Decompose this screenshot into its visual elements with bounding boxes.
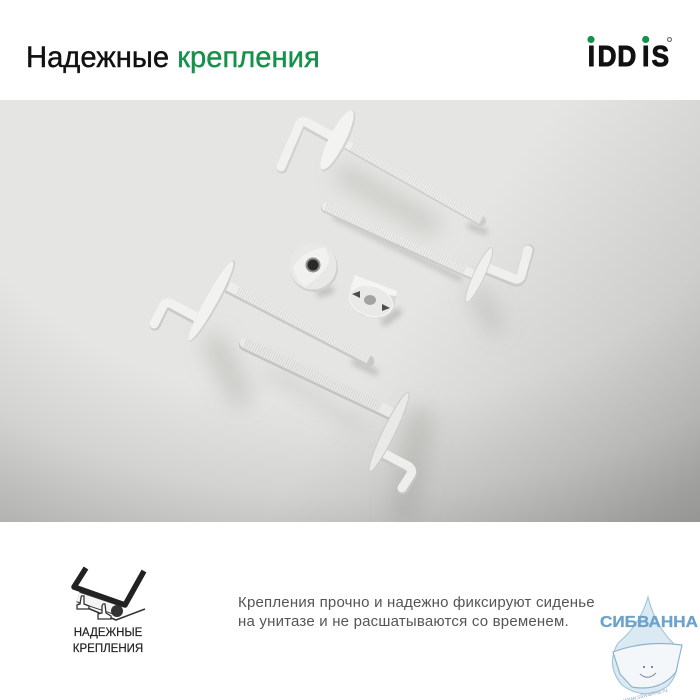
icon: hinge and seat xyxy=(71,566,146,621)
bolt 2 xyxy=(326,207,529,305)
icon caption: КРЕПЛЕНИЯ xyxy=(73,643,143,655)
bolt 3 xyxy=(154,257,369,361)
watermark: Sibvanna: СИБВАННА xyxy=(600,614,698,631)
logo: IDDIS: IDDIS xyxy=(588,40,669,72)
icon caption xyxy=(73,627,143,655)
watermark: Sibvanna xyxy=(600,595,698,700)
icon caption: НАДЕЖНЫЕ xyxy=(74,627,142,639)
title: Надежные крепления xyxy=(26,42,320,74)
soft shadows xyxy=(215,175,495,510)
knob 2 xyxy=(345,275,397,322)
description text xyxy=(238,594,595,630)
description text: на унитазе и не расшатываются со временем. xyxy=(238,612,569,630)
knob 1 xyxy=(290,242,338,292)
product photo: white mounting bolts xyxy=(0,100,700,522)
bolt 1 xyxy=(281,107,481,221)
bolt 4 xyxy=(245,343,414,489)
description text: Крепления прочно и надежно фиксируют сиденье xyxy=(238,594,595,611)
